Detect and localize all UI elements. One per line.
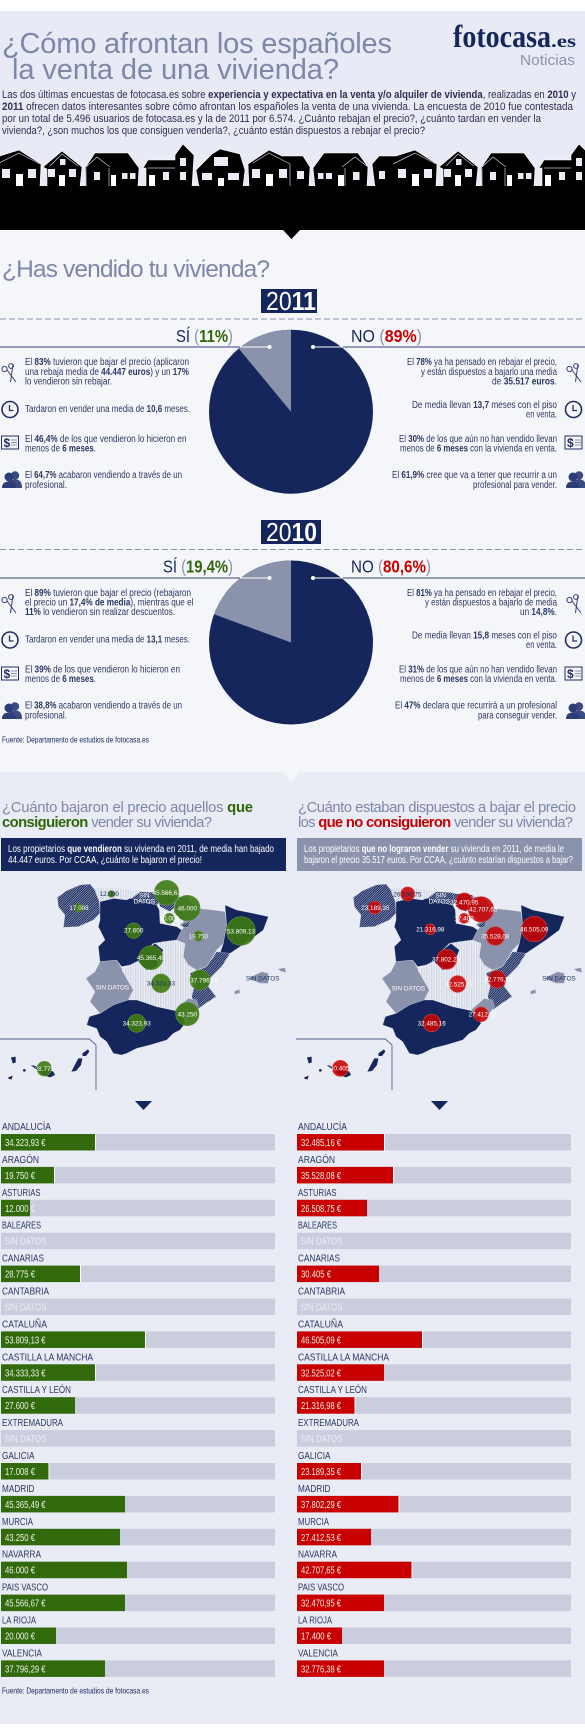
title: la venta de una vivienda?	[12, 54, 339, 86]
map: sold: SIN DATOS	[246, 976, 279, 983]
icons right 2011: $	[567, 436, 574, 450]
map: not sold: 37.802,29	[432, 957, 461, 964]
icons right 2010: $	[567, 667, 574, 681]
title: ¿Cómo afrontan los españoles	[2, 28, 392, 60]
bar: Murcia right: MURCIA	[298, 1517, 329, 1528]
heading: no consiguieron	[298, 800, 576, 831]
header background	[0, 11, 585, 231]
bar: Asturias left: 12.000 €	[5, 1204, 35, 1215]
map: not sold: 35.528,08	[481, 933, 510, 940]
text left 2011: menos de 6 meses.	[25, 444, 96, 454]
section background: sold	[0, 230, 585, 772]
bar: Murcia left	[1, 1517, 275, 1545]
map: not sold: 32.525,02	[445, 982, 474, 989]
icons right 2010	[565, 595, 585, 719]
bar: Castilla y León left: 27.600 €	[5, 1401, 35, 1412]
bar: La Rioja left: LA RIOJA	[2, 1616, 36, 1626]
year 2010: 2010	[266, 517, 317, 547]
bar: Cantabria left	[1, 1286, 275, 1315]
icons right 2011	[565, 364, 585, 488]
map: sold: 20.000	[160, 915, 179, 922]
map: not sold: 32.776,38	[484, 977, 513, 984]
text right 2011: en venta.	[526, 410, 557, 420]
logo: fotocasa.es Noticias: Noticias	[520, 52, 575, 69]
bar: País Vasco left: 45.566,67 €	[5, 1599, 46, 1610]
map: sold: SIN	[139, 893, 150, 900]
map: not sold: 21.316,98	[416, 927, 445, 934]
bar: Castilla y León left: CASTILLA Y LEÓN	[2, 1383, 71, 1396]
map: sold: 45.566,67	[153, 890, 181, 897]
map: sold: 12.000	[100, 891, 119, 898]
intro text: vivienda?, ¿son muchos los que consiguen venderla?, ¿cuánto están dispuestos a rebajar el precio?	[2, 125, 425, 137]
text left 2011: Tardaron en vender una media de 10,6 meses.	[25, 404, 190, 415]
title	[2, 28, 392, 86]
bar: Aragón left: 19.750 €	[5, 1171, 35, 1182]
text right 2010: El 47% declara que recurrirá a un profesional	[395, 700, 557, 712]
callout: vendieron: Los propietarios que vendieron su vivienda en 2011, de media han bajado	[8, 844, 274, 855]
bar: Galicia left	[1, 1451, 275, 1480]
bar: Castilla La Mancha right: CASTILLA LA MANCHA	[298, 1352, 389, 1363]
bar: Castilla La Mancha left: 34.333,33 €	[5, 1368, 46, 1379]
map: sold: 45.365,49	[137, 955, 166, 962]
bar: Canarias right	[297, 1254, 571, 1282]
map: not sold: SIN DATOS	[542, 976, 576, 983]
bar: Galicia right: GALICIA	[298, 1451, 331, 1462]
map: sold: 17.008	[69, 905, 89, 912]
intro text: Las dos últimas encuestas de fotocasa.es sobre experiencia y expectativa en la venta y/o alquiler de vivienda, realizadas en 2010 y	[2, 89, 576, 101]
bar: La Rioja right	[297, 1616, 571, 1644]
bar: Navarra left: NAVARRA	[2, 1550, 41, 1561]
text right 2011: de 35.517 euros.	[492, 376, 557, 388]
bar: Murcia right	[297, 1517, 571, 1545]
text left 2011: El 46,4% de los que vendieron lo hicieron en	[25, 434, 186, 445]
map: not sold: SIN DATOS	[392, 985, 425, 992]
no 89%: NO (89%)	[351, 326, 422, 346]
map: not sold: 30.405	[330, 1066, 350, 1073]
text left 2011: El 64,7% acabaron vendiendo a través de un	[25, 470, 182, 481]
map: sold: 37.796,29	[190, 977, 219, 984]
text left 2010: El 39% de los que vendieron lo hicieron en	[25, 664, 180, 676]
map: sold: 34.333,33	[147, 981, 176, 988]
bar: Cataluña left: CATALUÑA	[2, 1317, 47, 1330]
text left 2010: El 89% tuvieron que bajar el precio (rebajaron	[25, 588, 191, 599]
bar: País Vasco right	[297, 1583, 571, 1611]
map: not sold: 46.505,09	[520, 926, 549, 933]
bar: Castilla y León left	[1, 1383, 275, 1414]
text right 2011: De media llevan 13,7 meses con el piso	[412, 400, 557, 411]
bar: Cataluña right	[297, 1317, 571, 1348]
text right 2010	[395, 588, 557, 722]
bar: Castilla La Mancha left	[1, 1352, 275, 1381]
heading: consiguieron	[2, 800, 253, 831]
map: not sold	[296, 884, 582, 1090]
heading: consiguieron: ¿Cuánto bajaron el precio aquellos que	[2, 800, 253, 816]
bar: Baleares right: BALEARES	[298, 1221, 337, 1232]
bar: Navarra right	[297, 1550, 571, 1578]
bar: Castilla y León right: CASTILLA Y LEÓN	[298, 1383, 367, 1396]
pie chart 2011	[209, 330, 373, 494]
bar: Baleares left	[1, 1221, 275, 1249]
bar: Aragón right	[297, 1153, 571, 1183]
bar: Galicia left: 17.008 €	[5, 1467, 35, 1478]
bar: Asturias right: ASTURIAS	[298, 1188, 337, 1199]
arrow down left	[135, 1101, 152, 1110]
bar: Valencia right: VALENCIA	[298, 1648, 338, 1659]
text right 2011: profesional para vender.	[473, 480, 557, 491]
bar: Madrid left: MADRID	[2, 1484, 34, 1495]
bar: Extremadura right	[297, 1418, 571, 1447]
bar: Asturias right: 26.508,75 €	[301, 1204, 341, 1215]
bar: La Rioja left	[1, 1616, 275, 1644]
bar: Canarias right: 30.405 €	[301, 1270, 331, 1281]
bar: País Vasco left: PAIS VASCO	[2, 1583, 48, 1594]
bar: Castilla y León right: 21.316,98 €	[301, 1401, 341, 1412]
bar: La Rioja right: 17.400 €	[301, 1632, 331, 1642]
bar: Cantabria right	[297, 1286, 571, 1315]
map: sold: SIN DATOS	[96, 984, 129, 991]
logo: fotocasa.es Noticias: fotocasa	[453, 18, 551, 54]
bar: Navarra right: NAVARRA	[298, 1550, 337, 1561]
heading: no consiguieron: los que no consiguieron vender su vivienda?	[298, 815, 573, 831]
bar: Aragón right: 35.528,08 €	[301, 1171, 341, 1182]
bar: Navarra left	[1, 1550, 275, 1578]
map: not sold: 32.470,95	[450, 899, 479, 906]
bar: Madrid left: 45.365,49 €	[5, 1500, 46, 1511]
text right 2010: menos de 6 meses con la vivienda en venta.	[400, 674, 557, 685]
intro text	[2, 89, 576, 137]
map: not sold: SIN	[435, 893, 446, 900]
bar: Cantabria left: SIN DATOS	[4, 1302, 46, 1314]
text right 2011	[392, 357, 557, 491]
bar: La Rioja left: 20.000 €	[5, 1632, 35, 1642]
bar: Galicia left: GALICIA	[2, 1451, 35, 1462]
map: not sold: 23.189,35	[361, 905, 390, 912]
bar: Baleares right: SIN DATOS	[300, 1236, 342, 1248]
bar: Cataluña left	[1, 1317, 275, 1348]
bar: Valencia left: VALENCIA	[2, 1648, 42, 1659]
callout: vendieron	[1, 838, 286, 871]
map: not sold: 32.485,16	[418, 1020, 446, 1027]
bar: Andalucía left	[1, 1120, 275, 1150]
bar: Extremadura right: EXTREMADURA	[298, 1418, 359, 1429]
bar: Canarias left: CANARIAS	[2, 1254, 44, 1265]
bar: La Rioja right: LA RIOJA	[298, 1616, 332, 1626]
bar: Valencia left	[1, 1648, 275, 1677]
source note bottom: Fuente: Departamento de estudios de fotocasa.es	[2, 1686, 149, 1696]
year 2011: 2011	[266, 286, 316, 316]
bar: Andalucía right	[297, 1120, 571, 1150]
text right 2011: menos de 6 meses con la vivienda en venta.	[400, 444, 557, 454]
bar: Cantabria right: SIN DATOS	[300, 1302, 342, 1314]
map: sold: 28.775	[35, 1066, 54, 1073]
text left 2011	[25, 357, 190, 491]
bar: Canarias left: 28.775 €	[5, 1270, 35, 1281]
text right 2010: en venta.	[526, 640, 557, 651]
bar: Valencia left: 37.796,29 €	[5, 1664, 46, 1675]
text right 2010: De media llevan 15,8 meses con el piso	[412, 630, 557, 642]
bar: Cataluña right: CATALUÑA	[298, 1317, 343, 1330]
bar: Castilla La Mancha left: CASTILLA LA MANCHA	[2, 1352, 93, 1363]
bar: Murcia left: 43.250 €	[5, 1533, 35, 1544]
logo: fotocasa.es Noticias	[453, 18, 576, 69]
bar: País Vasco right: PAIS VASCO	[298, 1583, 344, 1594]
map: sold	[0, 880, 286, 1090]
bar: Asturias right	[297, 1188, 571, 1216]
bar: Madrid right: MADRID	[298, 1484, 330, 1495]
icons left 2010: $	[4, 667, 10, 681]
bar: Baleares left: BALEARES	[2, 1221, 41, 1232]
bar: Andalucía left: ANDALUCÍA	[2, 1120, 51, 1133]
source note: Fuente: Departamento de estudios de fotocasa.es	[2, 734, 149, 744]
bar: Galicia right	[297, 1451, 571, 1480]
map: not sold: 17.400	[454, 915, 474, 922]
text left 2011: lo vendieron sin rebajar.	[25, 376, 112, 388]
si 19,4%: SÍ (19,4%)	[163, 556, 233, 576]
bar: Galicia right: 23.189,35 €	[301, 1467, 341, 1478]
text left 2010: El 38,8% acabaron vendiendo a través de un	[25, 700, 182, 712]
no 80,6%: NO (80,6%)	[351, 556, 431, 576]
bar: Canarias left	[1, 1254, 275, 1282]
arrow down right	[431, 1101, 448, 1110]
text left 2010: el precio un 17,4% de media), mientras que el	[25, 598, 194, 608]
text left 2011: El 83% tuvieron que bajar el precio (aplicaron	[25, 357, 189, 368]
section background: regions	[0, 772, 585, 1724]
text right 2010: para conseguir vender.	[478, 710, 557, 722]
bar: Andalucía right: ANDALUCÍA	[298, 1120, 347, 1133]
icons left 2011: $	[4, 436, 10, 450]
heading: has vendido: ¿Has vendido tu vivienda?	[2, 256, 270, 283]
text left 2011: profesional.	[25, 480, 67, 491]
bar: Andalucía left: 34.323,93 €	[5, 1138, 46, 1149]
bar: Cataluña right: 46.505,09 €	[301, 1335, 341, 1346]
icons left 2011	[2, 364, 22, 488]
bar: Canarias right: CANARIAS	[298, 1254, 340, 1265]
map: sold: 19.750	[189, 933, 208, 940]
map: sold: 43.250	[178, 1011, 197, 1018]
bar: Cantabria right: CANTABRIA	[298, 1286, 345, 1298]
houses skyline	[0, 144, 585, 239]
bar: Castilla y León right	[297, 1383, 571, 1414]
bar: Extremadura left	[1, 1418, 275, 1447]
bar: Valencia right	[297, 1648, 571, 1677]
bar: Aragón right: ARAGÓN	[298, 1153, 335, 1166]
bar: País Vasco right: 32.470,95 €	[301, 1599, 341, 1610]
bar: Castilla La Mancha right	[297, 1352, 571, 1381]
map: sold: DATOS	[134, 899, 155, 906]
bar: Madrid right: 37.802,29 €	[301, 1500, 341, 1511]
text left 2010: profesional.	[25, 710, 67, 722]
pie chart 2010	[209, 560, 373, 724]
text left 2010	[25, 588, 194, 722]
bar: Navarra left: 46.000 €	[5, 1566, 35, 1577]
map: sold: 53.809,13	[227, 928, 256, 935]
bar: Baleares right	[297, 1221, 571, 1249]
notch arrow	[283, 772, 299, 782]
map: sold: 34.323,93	[123, 1021, 151, 1028]
bar: Cataluña left: 53.809,13 €	[5, 1335, 46, 1346]
text left 2010: 11% lo vendieron sin realizar descuentos.	[25, 607, 175, 618]
logo: fotocasa.es Noticias: .es	[551, 31, 576, 51]
bar: Murcia left: MURCIA	[2, 1517, 33, 1528]
bar: País Vasco left	[1, 1583, 275, 1611]
bar: Extremadura left: EXTREMADURA	[2, 1418, 63, 1429]
text left 2010: menos de 6 meses.	[25, 674, 96, 685]
map: not sold: 26.508,75	[393, 891, 422, 898]
bar: Baleares left: SIN DATOS	[4, 1236, 46, 1248]
heading: consiguieron: consiguieron vender su vivienda?	[2, 815, 212, 831]
si 11%: SÍ (11%)	[176, 326, 233, 346]
bar: Navarra right: 42.707,65 €	[301, 1566, 341, 1577]
bar: Madrid left	[1, 1484, 275, 1512]
map: not sold: 42.707,65	[469, 907, 498, 914]
text left 2011: una rebaja media de 44.447 euros) y un 17%	[25, 367, 189, 378]
map: sold: 27.600	[124, 928, 144, 935]
bar: Cantabria left: CANTABRIA	[2, 1286, 49, 1298]
bar: Murcia right: 27.412,53 €	[301, 1533, 341, 1544]
heading: no consiguieron: ¿Cuánto estaban dispuestos a bajar el precio	[298, 800, 576, 816]
text right 2011: El 61,9% cree que va a tener que recurrir a un	[392, 470, 557, 481]
callout: no vendieron	[297, 838, 582, 871]
bar: Extremadura left: SIN DATOS	[4, 1433, 46, 1445]
map: not sold: 27.412,53	[469, 1012, 497, 1019]
bar: Extremadura right: SIN DATOS	[300, 1433, 342, 1445]
bar: Asturias left: ASTURIAS	[2, 1188, 41, 1199]
bar: Madrid right	[297, 1484, 571, 1512]
icons left 2010	[2, 595, 22, 719]
bar: Valencia right: 32.776,38 €	[301, 1664, 341, 1675]
bar: Andalucía right: 32.485,16 €	[301, 1138, 341, 1149]
text right 2010: un 14,8%.	[520, 607, 557, 618]
bar: Aragón left	[1, 1153, 275, 1183]
map: sold: 46.000	[178, 905, 197, 912]
bar: Aragón left: ARAGÓN	[2, 1153, 39, 1166]
map: not sold: DATOS	[429, 899, 450, 906]
bar: Castilla La Mancha right: 32.525,02 €	[301, 1368, 341, 1379]
bar: Asturias left	[1, 1188, 275, 1216]
text left 2010: Tardaron en vender una media de 13,1 meses.	[25, 634, 190, 646]
callout: vendieron: 44.447 euros. Por CCAA, ¿cuánto le bajaron el precio!	[8, 855, 202, 866]
